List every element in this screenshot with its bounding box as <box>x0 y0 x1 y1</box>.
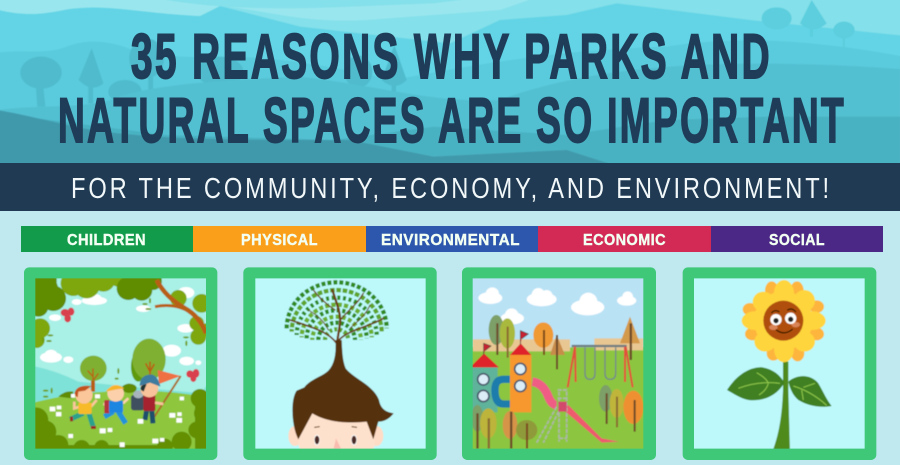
child 1 <box>70 386 97 429</box>
connecting tube <box>495 379 511 404</box>
flag <box>158 370 181 384</box>
right leaf <box>788 376 832 407</box>
panel: playground <box>462 267 656 460</box>
tree crown <box>287 282 387 340</box>
tree branches <box>290 290 383 360</box>
ground <box>35 390 196 449</box>
child 2 <box>103 385 128 423</box>
tab: physical: PHYSICAL <box>241 232 318 249</box>
stem <box>772 362 790 453</box>
trees left <box>20 38 407 107</box>
castle right tower <box>510 331 531 412</box>
left leaf <box>727 367 784 400</box>
tab: children: CHILDREN <box>67 232 146 249</box>
header landscape <box>0 0 900 177</box>
panel: children playing <box>23 267 217 460</box>
castle left tower <box>472 342 500 413</box>
leaf veins <box>738 373 827 405</box>
eyes <box>314 435 357 445</box>
panel: tree growing from head <box>243 267 437 460</box>
tab: economic: ECONOMIC <box>583 232 666 249</box>
foliage frame <box>35 278 206 349</box>
tab: social <box>711 226 883 252</box>
panel: smiling sunflower <box>683 267 876 460</box>
slide <box>532 382 619 443</box>
face <box>298 412 375 449</box>
eyes <box>770 313 796 325</box>
clouds <box>40 287 201 365</box>
ears <box>288 426 302 446</box>
yellow petals <box>742 280 826 362</box>
background trees <box>58 339 166 398</box>
swing set <box>568 346 633 387</box>
distant trees top right <box>762 0 855 32</box>
eyebrows <box>314 426 358 428</box>
tab: economic <box>538 226 711 252</box>
trees front left <box>471 405 537 449</box>
trees front right <box>599 385 643 432</box>
tab: social: SOCIAL <box>769 232 825 249</box>
dark ground fringe <box>35 388 206 449</box>
tab: environmental <box>366 226 538 252</box>
subtitle band <box>0 163 900 211</box>
tab: physical <box>193 226 366 252</box>
category tabs <box>21 226 883 252</box>
butterflies <box>61 308 199 382</box>
leaves <box>42 298 189 398</box>
smile <box>772 309 796 333</box>
tree branch <box>157 280 206 333</box>
tab: children <box>21 226 193 252</box>
nose <box>334 438 341 449</box>
flowers <box>50 394 184 447</box>
title <box>58 22 846 156</box>
orange petals <box>743 281 824 361</box>
child 3 <box>131 375 163 423</box>
clouds <box>478 287 636 324</box>
flower face <box>763 301 803 341</box>
hair and trunk <box>292 340 394 439</box>
trees back <box>489 315 640 369</box>
tab: environmental: ENVIRONMENTAL <box>381 232 520 249</box>
fence <box>473 338 643 351</box>
